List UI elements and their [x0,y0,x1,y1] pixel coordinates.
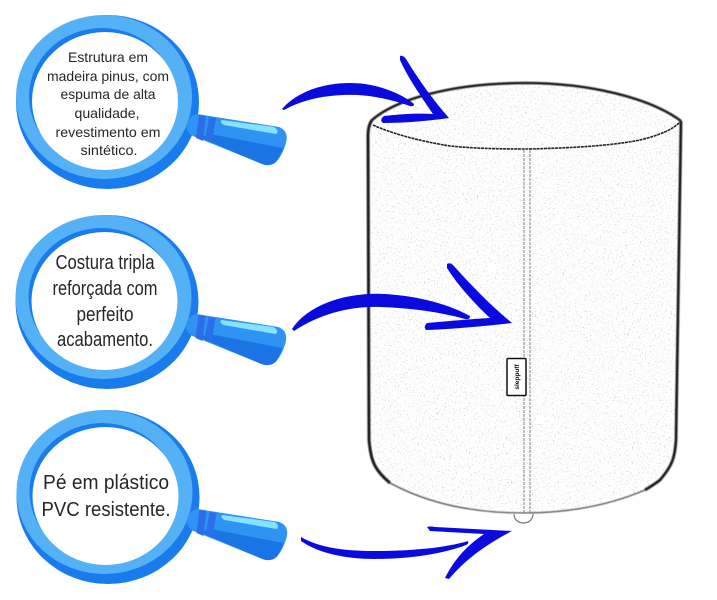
text: seam: acabamento. [57,329,153,351]
arrow 2 [292,263,512,331]
magnifier 1 [16,15,287,189]
text: structure: qualidade, [74,105,140,121]
text: structure [47,49,169,158]
label tag [507,358,526,396]
text: structure: sintético. [80,142,138,158]
arrow 3 [301,526,512,579]
text: seam: Costura tripla [56,252,155,274]
text: structure: espuma de alta [60,86,156,102]
arrow 1 [282,56,449,123]
text: foot [42,472,170,521]
magnifier 2 [16,215,286,389]
text: seam: perfeito [76,304,134,326]
top seam [373,122,680,149]
foot [514,514,533,523]
icon: magnifying glass [16,410,287,584]
ottoman texture [360,75,690,520]
ottoman outline [368,83,681,513]
text: structure: revestimento em [56,124,160,140]
text: seam [52,252,158,351]
vertical seam [524,150,530,513]
icon: magnifying glass [16,15,287,189]
text: foot: Pé em plástico [43,472,169,494]
label tag: sleppuff [514,364,521,390]
text: structure: madeira pinus, com [47,68,169,84]
magnifier 3 [16,410,287,584]
illustration: cylindrical ottoman [360,75,690,523]
icon: magnifying glass [16,215,286,389]
text: seam: reforçada com [52,278,158,300]
text: structure: Estrutura em [68,49,148,65]
text: foot: PVC resistente. [42,499,170,521]
